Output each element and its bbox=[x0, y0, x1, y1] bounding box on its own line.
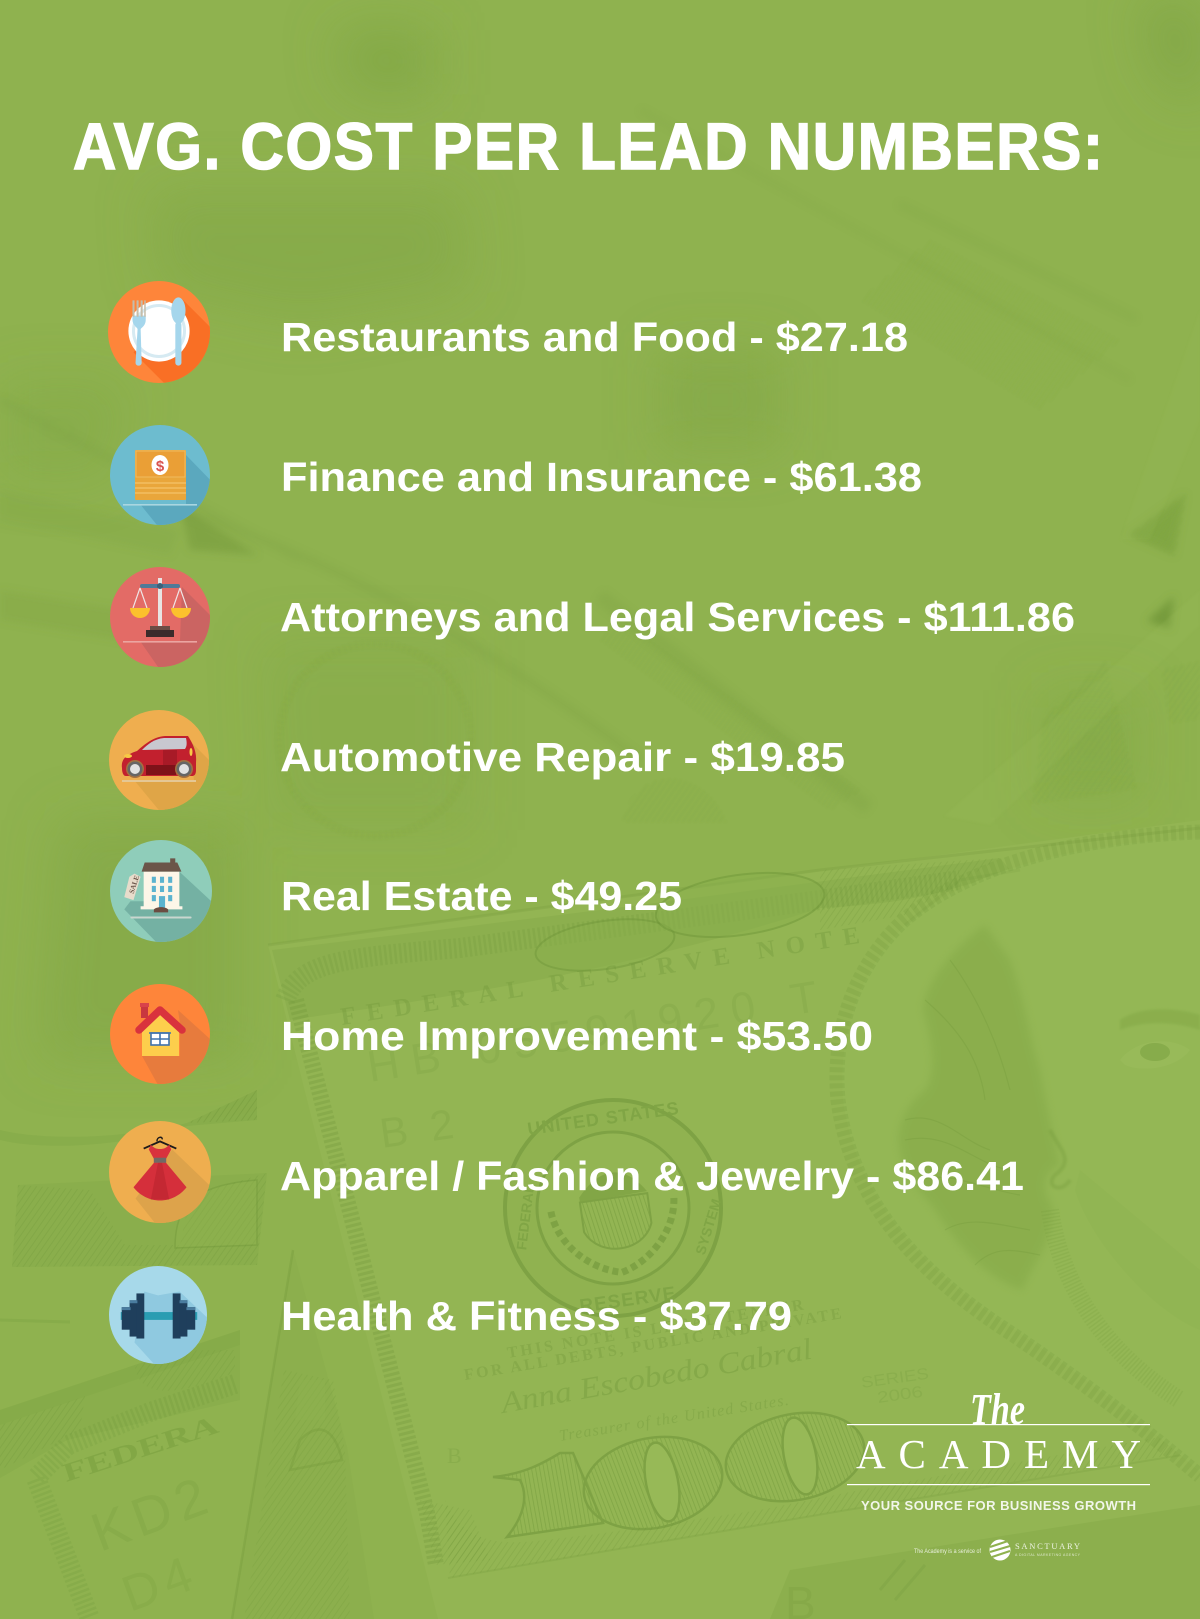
main hundred dollar bill: Treasurer of the United States. bbox=[558, 1392, 790, 1445]
row: real estate bbox=[110, 840, 682, 952]
left guilloche bbox=[296, 1000, 436, 1565]
icon: plate and cutlery bbox=[108, 281, 210, 383]
vertical folded bill sliver bbox=[232, 1250, 374, 1619]
main hundred dollar bill: THIS NOTE IS LEGAL TENDER bbox=[506, 1297, 805, 1362]
row: home improvement bbox=[110, 984, 873, 1094]
service note with Sanctuary mark: SANCTUARY bbox=[1015, 1541, 1080, 1551]
icon: stack of money bbox=[110, 425, 210, 525]
face bbox=[1120, 1009, 1200, 1030]
row: attorneys and legal services bbox=[110, 567, 1075, 677]
icon: house bbox=[110, 984, 210, 1084]
main hundred dollar bill: B2 bbox=[377, 1100, 457, 1157]
main hundred dollar bill: B bbox=[447, 1443, 462, 1468]
treasury seal: SYSTEM bbox=[692, 1197, 724, 1257]
upper blurry bills bbox=[0, 0, 1200, 1060]
label: Health & Fitness - $37.79 bbox=[281, 1293, 792, 1339]
service note with Sanctuary mark bbox=[914, 1540, 1081, 1560]
treasury seal: RESERVE bbox=[578, 1283, 678, 1317]
label: Finance and Insurance - $61.38 bbox=[281, 454, 922, 500]
icon: scales of justice bbox=[110, 567, 210, 667]
main hundred dollar bill: FEDERAL RESERVE NOTE bbox=[339, 922, 861, 1031]
service note with Sanctuary mark: A DIGITAL MARKETING AGENCY bbox=[1015, 1553, 1081, 1557]
logo: The Academy: ACADEMY bbox=[856, 1431, 1141, 1477]
treasury seal: FEDERAL bbox=[513, 1183, 537, 1251]
top engraved band bbox=[272, 858, 1010, 1020]
logo: The Academy: YOUR SOURCE FOR BUSINESS GROWTH bbox=[861, 1498, 1136, 1513]
label: Attorneys and Legal Services - $111.86 bbox=[280, 594, 1075, 640]
label: Real Estate - $49.25 bbox=[281, 873, 682, 919]
logo: The Academy: The bbox=[970, 1385, 1025, 1434]
logo: The Academy bbox=[847, 1385, 1150, 1560]
main hundred dollar bill: 2006 bbox=[876, 1384, 924, 1407]
left-side bills bbox=[0, 1090, 374, 1619]
large 100 numeral bbox=[493, 1401, 872, 1541]
treasury seal bbox=[491, 1086, 738, 1330]
label: Restaurants and Food - $27.18 bbox=[281, 314, 908, 360]
treasury seal: UNITED STATES bbox=[526, 1098, 681, 1139]
main hundred dollar bill: HB 05591920 T bbox=[364, 972, 821, 1092]
main hundred dollar bill bbox=[268, 820, 1200, 1619]
icon: building with sale tag: SALE bbox=[128, 874, 141, 895]
legal text and signature: FOR ALL DEBTS, PUBLIC AND PRIVATE bbox=[463, 1305, 843, 1384]
icon: red car bbox=[109, 710, 209, 810]
main hundred dollar bill: SERIES bbox=[860, 1366, 930, 1392]
left-side bills: KD2 bbox=[84, 1467, 215, 1563]
left-side bills: FEDERA bbox=[59, 1410, 222, 1488]
band beneath the 100 numeral bbox=[445, 1430, 1200, 1578]
row: automotive repair bbox=[109, 710, 845, 820]
main hundred dollar bill: Anna Escobedo Cabral bbox=[496, 1333, 814, 1420]
label: Automotive Repair - $19.85 bbox=[280, 734, 845, 780]
label: Home Improvement - $53.50 bbox=[281, 1013, 873, 1059]
icon: red dress bbox=[109, 1121, 211, 1223]
icon: building with sale tag bbox=[110, 840, 212, 942]
hair bbox=[899, 925, 1060, 1290]
title: AVG. COST PER LEAD NUMBERS: bbox=[73, 110, 1103, 184]
Franklin portrait oval bbox=[837, 832, 1200, 1476]
icon: stack of money: $ bbox=[156, 458, 165, 475]
service note with Sanctuary mark: The Academy is a service of bbox=[914, 1549, 981, 1555]
row: apparel, fashion and jewelry bbox=[109, 1121, 1024, 1233]
label: Apparel / Fashion & Jewelry - $86.41 bbox=[280, 1153, 1024, 1199]
icon: dumbbell bbox=[109, 1266, 207, 1364]
row: restaurants and food bbox=[108, 281, 908, 393]
row: finance and insurance bbox=[110, 425, 922, 535]
row: health and fitness bbox=[109, 1266, 792, 1374]
